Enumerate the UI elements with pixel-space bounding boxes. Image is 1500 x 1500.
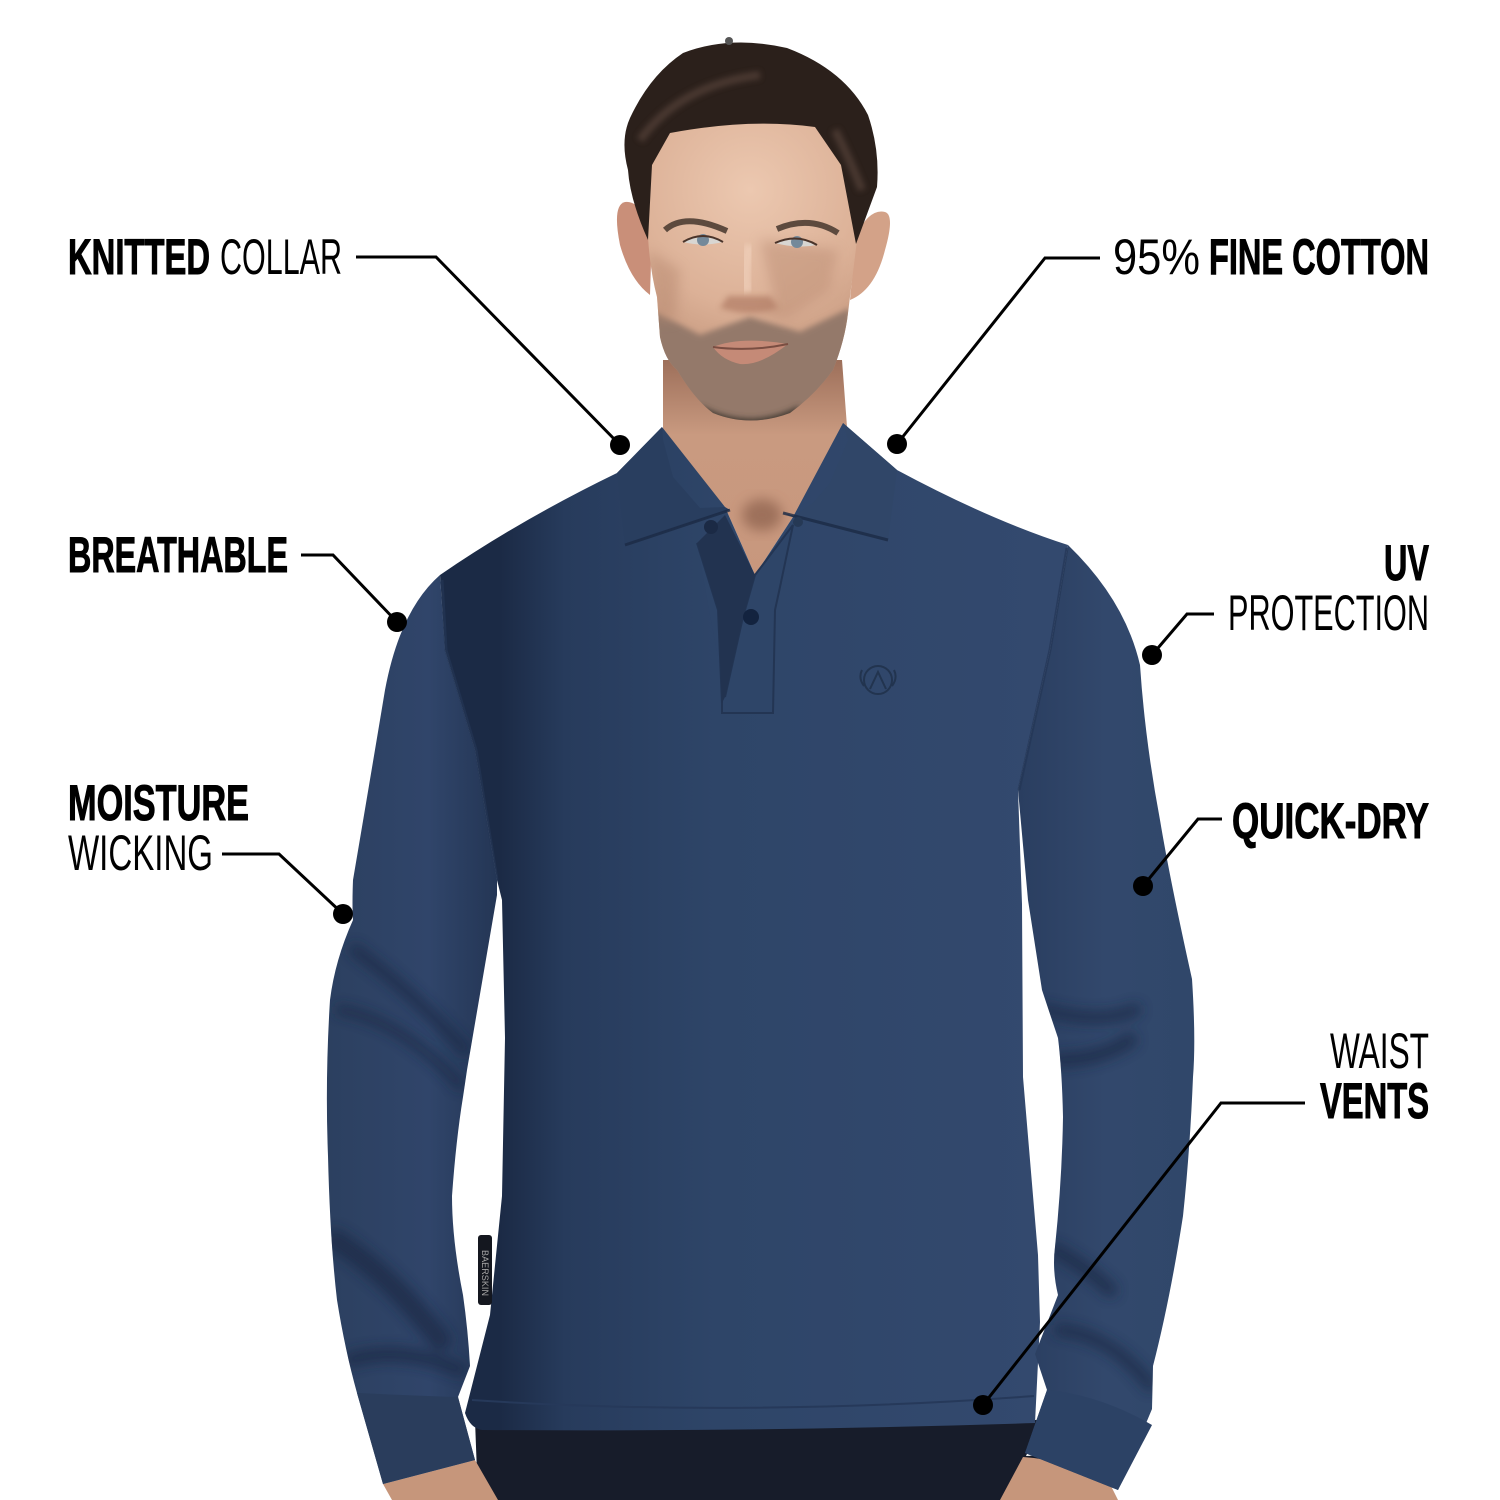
callout: 95% fine cotton: 95% bbox=[1113, 229, 1200, 285]
face shading, stubble, lips bbox=[648, 240, 850, 430]
callout: breathable: BREATHABLE bbox=[68, 527, 288, 583]
callout: 95% fine cotton bbox=[887, 229, 1429, 454]
right edge cover bbox=[1026, 1420, 1122, 1456]
neck bbox=[663, 360, 848, 575]
face bbox=[648, 120, 857, 420]
callout: UV protection bbox=[1142, 535, 1429, 665]
callout: moisture wicking: MOISTURE bbox=[68, 775, 249, 831]
left sleeve bbox=[327, 575, 497, 1484]
callout: breathable bbox=[68, 527, 407, 632]
side tag: BAERSKIN bbox=[480, 1250, 490, 1296]
shirt torso bbox=[440, 423, 1068, 1430]
buttons bbox=[743, 609, 759, 625]
chest logo bbox=[860, 666, 896, 694]
callout: moisture wicking: WICKING bbox=[68, 825, 213, 881]
cowlick bbox=[725, 37, 733, 45]
left cuff bbox=[357, 1393, 475, 1484]
armhole seams bbox=[442, 548, 1067, 880]
illustration: man wearing navy long sleeve polo bbox=[327, 37, 1194, 1500]
mouth bbox=[713, 341, 788, 364]
jeans bbox=[475, 1420, 1040, 1500]
callout: quick-dry bbox=[1133, 793, 1429, 896]
hair highlight bbox=[640, 75, 862, 190]
callout: knitted collar: KNITTED bbox=[68, 229, 210, 285]
callout: moisture wicking bbox=[68, 775, 353, 924]
right sleeve bbox=[1018, 545, 1194, 1490]
right cuff bbox=[1025, 1390, 1152, 1490]
hands bbox=[383, 1457, 1118, 1500]
placket shadow bbox=[697, 515, 755, 703]
callout: UV protection: UV bbox=[1384, 535, 1429, 591]
collarbone hollow bbox=[742, 499, 782, 531]
callout: knitted collar: COLLAR bbox=[220, 229, 342, 285]
side tag bbox=[478, 1235, 492, 1305]
callout: knitted collar bbox=[68, 229, 630, 455]
callout: waist vents bbox=[973, 1023, 1429, 1415]
ears bbox=[617, 202, 652, 295]
right sleeve folds bbox=[1045, 1010, 1150, 1385]
callout: waist vents: VENTS bbox=[1320, 1073, 1429, 1129]
placket bbox=[697, 525, 793, 713]
eyes and brows bbox=[665, 221, 727, 231]
left sleeve folds bbox=[335, 950, 465, 1370]
hem stitching bbox=[472, 1396, 1034, 1408]
callout: waist vents: WAIST bbox=[1330, 1023, 1429, 1079]
hair bbox=[624, 43, 878, 244]
collar bbox=[617, 427, 730, 545]
